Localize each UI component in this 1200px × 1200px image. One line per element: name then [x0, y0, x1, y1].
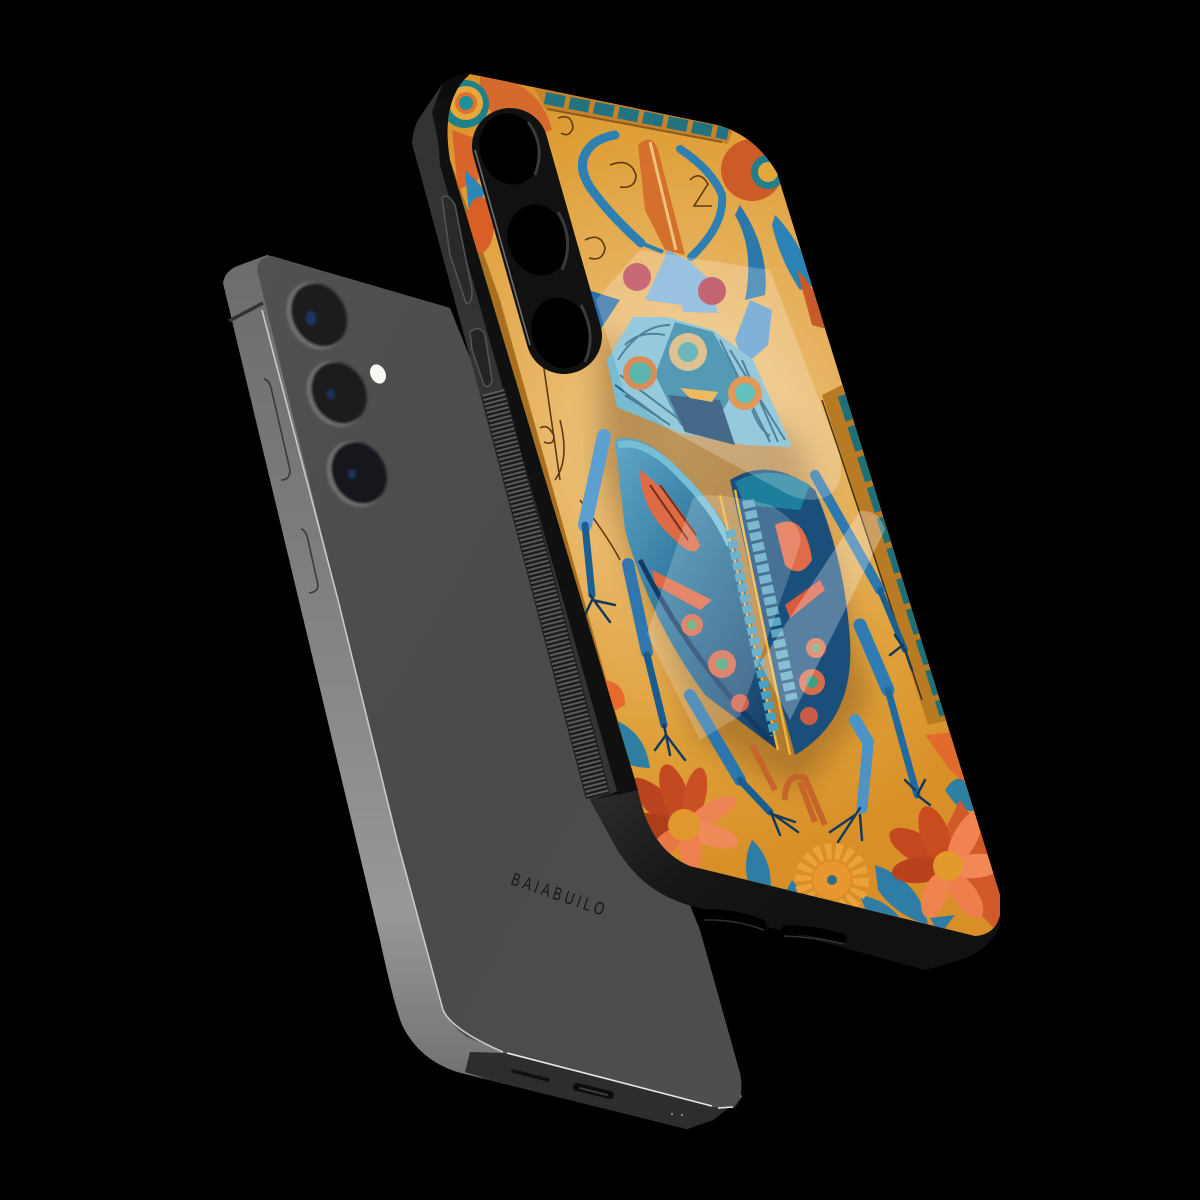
phone case: [412, 60, 1020, 970]
beetle eyes: [623, 263, 651, 291]
orange band left: [450, 160, 638, 790]
phone side frame: [223, 255, 742, 1129]
shoulder joints: [735, 300, 772, 365]
phone back panel: [257, 256, 741, 1107]
case body: [412, 74, 1000, 970]
grey phone: [223, 255, 742, 1129]
case bottom ports: [704, 914, 844, 944]
glass reflection right band: [760, 511, 885, 720]
rear camera lenses: [275, 272, 397, 517]
bottom leaves: [746, 840, 955, 935]
camera holes: [470, 105, 600, 376]
side buttons: [264, 379, 318, 593]
lower totem marks: [752, 745, 825, 825]
phone bottom edge: [465, 1052, 742, 1129]
illustration: phone and printed case: [223, 74, 1000, 1129]
scroll ornaments: [537, 117, 712, 560]
brand wordmark: BAIABUILO: [509, 870, 610, 921]
inner bevel: [436, 92, 638, 795]
lower side leaves and petals: [600, 680, 1000, 935]
power button: [470, 329, 492, 387]
head: [645, 250, 718, 313]
right flower: [889, 806, 994, 918]
frame highlight: [262, 310, 503, 1052]
antenna right: [680, 149, 722, 257]
right frieze: [822, 385, 950, 725]
bottom speaker: [513, 1071, 548, 1080]
thorax: [607, 317, 792, 447]
left wing: [615, 438, 778, 750]
antenna band: [229, 303, 263, 321]
glass reflection upper: [596, 250, 841, 500]
corner ornament top left: [441, 74, 552, 253]
left flower: [634, 764, 738, 868]
printed artwork: [448, 74, 1000, 936]
camera flash: [367, 362, 389, 386]
beetle legs: [585, 436, 930, 842]
mic holes: [671, 1114, 683, 1115]
charging port: [577, 1087, 610, 1095]
top frieze: [534, 87, 733, 144]
case side band: [412, 83, 622, 800]
wall shadow around beetle: [600, 330, 870, 790]
camera cut-out pill: [470, 105, 600, 376]
glass reflection lower: [647, 495, 801, 740]
grip ridges: [493, 392, 598, 796]
middle flower: [803, 851, 861, 909]
volume button: [442, 196, 472, 303]
art background: [448, 74, 1000, 936]
case lower corner: [590, 790, 1000, 970]
corner ornament top right: [721, 139, 830, 330]
right wing: [730, 470, 850, 755]
central totem: [638, 140, 685, 255]
antenna left: [582, 135, 641, 243]
